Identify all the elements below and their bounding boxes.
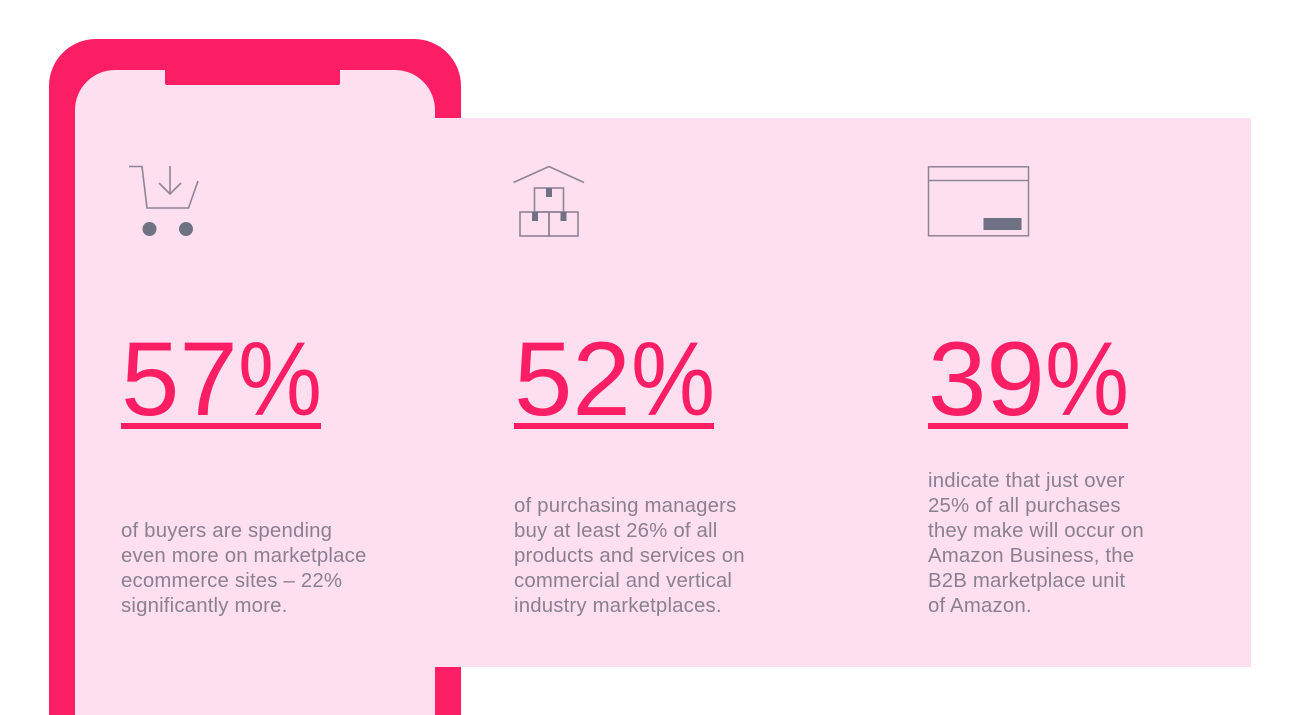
underline: 39% [928, 423, 1128, 429]
underline: 52% [514, 423, 714, 429]
text: 39% description: Amazon Business, the [928, 545, 1134, 567]
stat: 57% [121, 321, 322, 438]
text: 52% description [514, 495, 745, 617]
text: 52% description: products and services on [514, 545, 745, 567]
text: 39% description: indicate that just over [928, 470, 1125, 492]
text: 52% description: commercial and vertical [514, 570, 732, 592]
phone frame [49, 39, 461, 715]
stat: 52% [514, 321, 715, 438]
text: 52% description: of purchasing managers [514, 495, 737, 517]
text: 39% description: B2B marketplace unit [928, 570, 1125, 592]
text: 52% description: industry marketplaces. [514, 595, 722, 617]
text: 57% description: ecommerce sites – 22% [121, 570, 342, 592]
stat: 57%: % [238, 321, 322, 438]
text: 57% description: significantly more. [121, 595, 287, 617]
text: 57% description [121, 520, 366, 617]
stat: 39% [928, 321, 1129, 438]
icon: browser window [928, 166, 1030, 237]
icon: shopping cart with download arrow [129, 166, 199, 236]
text: 57% description: of buyers are spending [121, 520, 332, 542]
phone notch [165, 65, 340, 85]
icon: warehouse boxes [513, 166, 584, 237]
stat: 52%: 52 [514, 321, 631, 438]
stat: 52%: % [631, 321, 715, 438]
text: 39% description: 25% of all purchases [928, 495, 1121, 517]
stat: 57%: 57 [121, 321, 238, 438]
text: 52% description: buy at least 26% of all [514, 520, 717, 542]
underline: 57% [121, 423, 321, 429]
text: 57% description: even more on marketplace [121, 545, 366, 567]
text: 39% description [928, 470, 1144, 617]
phone screen [75, 70, 435, 715]
panel: statistics [435, 118, 1251, 667]
stat: 39%: 39 [928, 321, 1045, 438]
stat: 39%: % [1045, 321, 1129, 438]
text: 39% description: of Amazon. [928, 595, 1032, 617]
text: 39% description: they make will occur on [928, 520, 1144, 542]
